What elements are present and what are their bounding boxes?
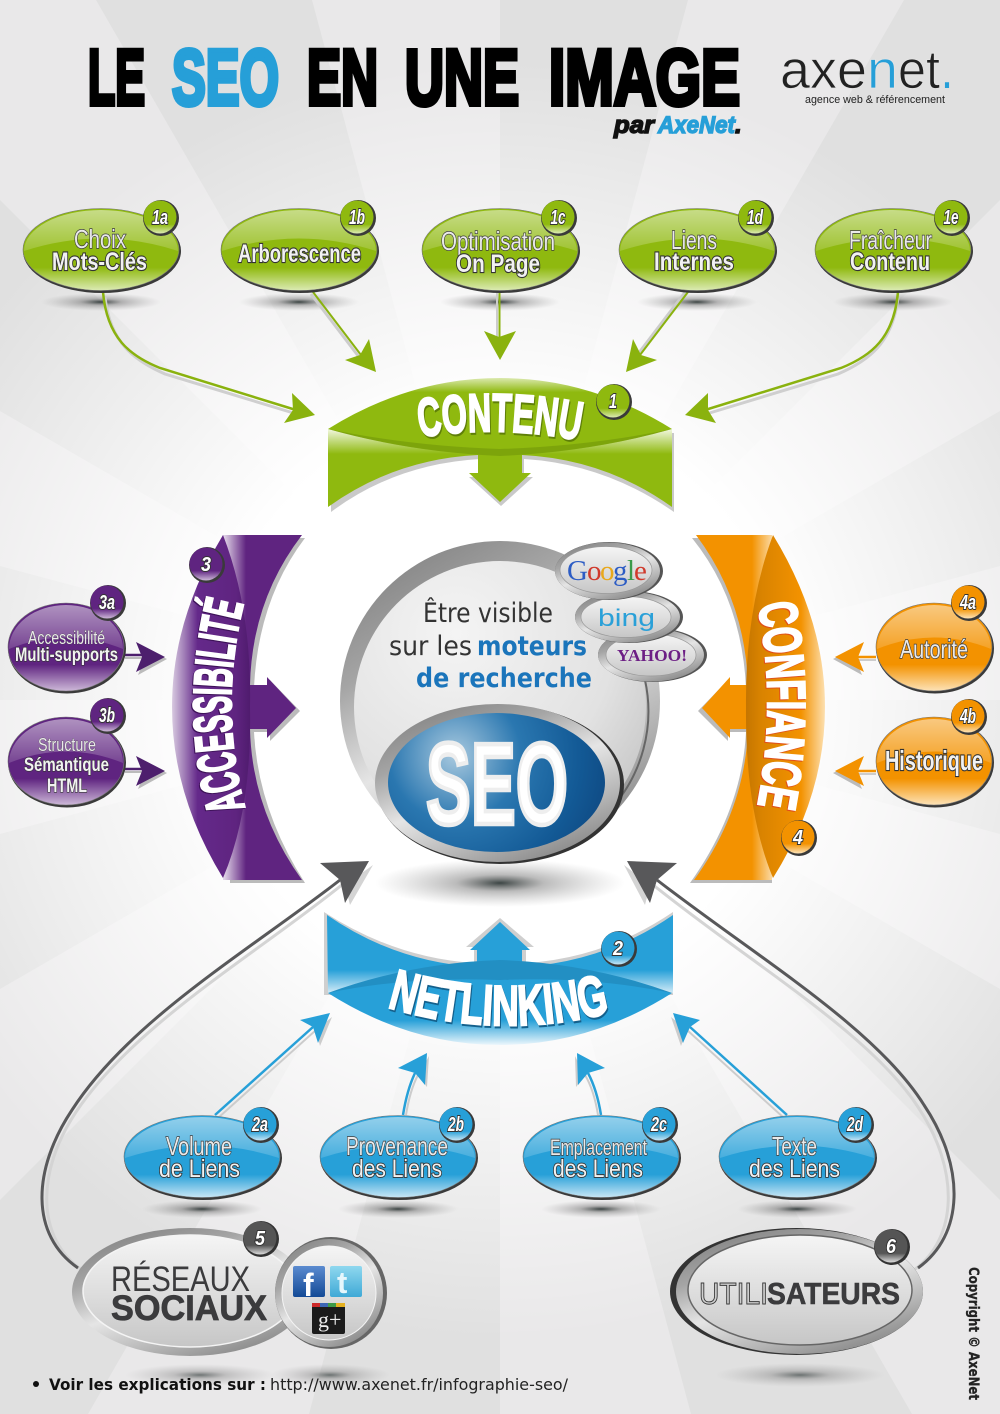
confiance label: CONFIANCE: [756, 602, 806, 812]
footer link: http://www.axenet.fr/infographie-seo/: [270, 1375, 569, 1394]
badge 2d: 2d: [846, 1114, 864, 1136]
pill: bing: [575, 591, 683, 643]
logo: axenet: [780, 40, 953, 106]
icon: google plus: g+: [318, 1307, 341, 1332]
badge 1: [596, 384, 632, 420]
bubble 1c: Optimisation On Page: On Page: [456, 250, 540, 278]
bubble 3a: Accessibilité Multi-supports: Accessibilité: [28, 628, 105, 648]
pill: yahoo: YAHOO!: [617, 646, 687, 665]
badge 3a: 3a: [99, 592, 115, 614]
accessibilité label: ACCESSIBILITÉ: [191, 596, 246, 812]
title: EN: [307, 32, 378, 122]
badge 1d: 1d: [747, 207, 764, 229]
bubble 2b: Provenance des Liens: [320, 1116, 478, 1200]
subtitle: par AxeNet: par: [613, 112, 656, 139]
contenu label: CONTENU: [418, 393, 586, 442]
bubble 1e: Fraîcheur Contenu: [815, 208, 973, 293]
badge 3a: [90, 585, 126, 621]
pill: google: l: [627, 555, 635, 587]
badge 1b: [340, 200, 376, 236]
badge 6: 6: [886, 1236, 897, 1258]
badge 5: 5: [255, 1228, 266, 1250]
bubble 2d: Texte des Liens: [719, 1116, 877, 1200]
badge 2a: [243, 1107, 279, 1143]
bubble 1e: Fraîcheur Contenu: Contenu: [850, 248, 930, 276]
arrow: 1a to contenu: [103, 292, 315, 423]
seo emblem: SEO: [426, 719, 568, 849]
arrow: 1b to contenu: [311, 292, 376, 372]
bubble 1b: Arborescence: [221, 208, 379, 293]
ribbon: netlinking: [324, 912, 673, 1045]
logo: axenet: axe: [780, 40, 867, 100]
badge 2: 2: [612, 938, 623, 960]
arrow: 1d to contenu: [626, 291, 688, 372]
arrow: 2d to netlinking: [671, 1013, 787, 1118]
bubble 1a: Choix Mots-Clés: Choix: [74, 224, 126, 254]
social icons disc: [275, 1237, 387, 1349]
pill: google: G: [567, 555, 588, 587]
ribbon: contenu: [328, 378, 674, 512]
réseaux sociaux panel: SOCIAUX: [111, 1289, 268, 1328]
bubble 3b: Structure Sémantique HTML: Sémantique: [24, 755, 109, 776]
badge 4: [781, 820, 817, 856]
badge 1a: [143, 200, 179, 236]
badge 2b: [439, 1107, 475, 1143]
bubble 2a: Volume de Liens: Volume: [166, 1131, 232, 1161]
badge 3: [189, 547, 225, 583]
title: IMAGE: [549, 32, 740, 122]
bubble 1d: Liens Internes: Liens: [671, 225, 717, 255]
bubble 1d: Liens Internes: [619, 208, 777, 293]
arrow: réseaux sociaux to seo: [42, 861, 373, 1270]
arrow: 2c to netlinking: [575, 1053, 605, 1115]
badge 4a: 4a: [959, 592, 976, 614]
arrow: 2a to netlinking: [215, 1013, 332, 1118]
central seo disc: [340, 541, 660, 864]
arrow: 3b to accessibilité: [125, 756, 167, 789]
badge 2a: 2a: [251, 1114, 268, 1136]
bubble 3b: Structure Sémantique HTML: HTML: [47, 776, 87, 797]
bubble 3b: Structure Sémantique HTML: [8, 717, 126, 808]
badge 1d: [738, 200, 774, 236]
pill: bing: bing: [598, 605, 655, 632]
badge 4a: [951, 585, 987, 621]
tagline: sur les: [389, 631, 472, 662]
logo: axenet: et: [898, 40, 940, 100]
réseaux sociaux panel: [72, 1228, 308, 1356]
badge 5: [243, 1221, 279, 1257]
bubble 2c: Emplacement des Liens: [523, 1116, 681, 1200]
bubble 4b: Historique: [876, 717, 994, 808]
pill: google: o: [600, 555, 614, 587]
bubble 2a: Volume de Liens: [124, 1116, 282, 1200]
arrow: 4b to confiance: [833, 756, 876, 789]
tagline: de recherche: [416, 663, 592, 694]
subtitle: par AxeNet: AxeNet: [657, 112, 736, 139]
bubble 3a: Accessibilité Multi-supports: Multi-supports: [15, 645, 118, 666]
badge 1a: 1a: [152, 207, 168, 229]
ribbon: confiance: [690, 535, 825, 883]
bubble 2d: Texte des Liens: Texte: [772, 1131, 817, 1161]
netlinking label: NETLINKING: [388, 968, 608, 1028]
bubble 2a: Volume de Liens: de Liens: [159, 1155, 240, 1183]
tagline: Être visible: [423, 597, 553, 629]
title: UNE: [405, 32, 519, 122]
badge 2b: 2b: [447, 1114, 464, 1136]
arrow: 1e to contenu: [685, 292, 898, 423]
logo: axenet: .: [941, 40, 953, 100]
footer link: Voir les explications sur :: [49, 1375, 266, 1394]
réseaux sociaux panel: RÉSEAUX: [111, 1260, 250, 1299]
contact shadows: [41, 293, 953, 1387]
bubble 2d: Texte des Liens: des Liens: [749, 1155, 840, 1183]
title: SEO: [172, 32, 279, 122]
badge 3: 3: [201, 554, 211, 576]
icon: twitter: t: [337, 1265, 347, 1300]
title: [88, 32, 740, 122]
badge 2c: [642, 1107, 678, 1143]
pill: yahoo: [598, 628, 707, 682]
badge 1c: 1c: [550, 207, 566, 229]
bubble 2c: Emplacement des Liens: Emplacement: [550, 1135, 647, 1160]
bubble 2b: Provenance des Liens: Provenance: [346, 1131, 448, 1161]
bubble 4a: Autorité: [876, 603, 994, 694]
badge 2c: 2c: [650, 1114, 667, 1136]
arrow: 4a to confiance: [833, 642, 876, 675]
bubble 2b: Provenance des Liens: des Liens: [352, 1155, 442, 1183]
bubble 1c: Optimisation On Page: [422, 208, 580, 293]
badge 1e: 1e: [944, 207, 958, 229]
pill: google: e: [634, 555, 647, 587]
arrow: 2b to netlinking: [398, 1053, 429, 1115]
pill: google: o: [587, 555, 602, 587]
utilisateurs panel: UTILI: [699, 1276, 768, 1311]
pill: google: g: [613, 555, 628, 587]
bubble 1e: Fraîcheur Contenu: Fraîcheur: [849, 225, 932, 255]
tagline: moteurs: [477, 631, 587, 662]
footer link: [33, 1375, 569, 1394]
badge 3b: [90, 698, 126, 734]
badge 4: 4: [792, 827, 803, 849]
title: LE: [88, 32, 145, 122]
badge 3b: 3b: [99, 705, 115, 727]
subtitle: par AxeNet: .: [735, 112, 742, 139]
bubble 1a: Choix Mots-Clés: Mots-Clés: [52, 248, 147, 276]
seo emblem: [375, 704, 624, 864]
bubble 3a: Accessibilité Multi-supports: [8, 603, 126, 694]
icon: facebook: f: [303, 1267, 314, 1303]
badge 1b: 1b: [349, 207, 365, 229]
logo: axenet: n: [867, 40, 898, 100]
badge 6: [874, 1229, 910, 1265]
utilisateurs panel: SATEURS: [767, 1276, 900, 1311]
pill: google: [555, 542, 663, 600]
bubble 1b: Arborescence: Arborescence: [238, 240, 361, 268]
arrow: 1c to contenu: [484, 292, 516, 360]
badge 1: 1: [609, 391, 617, 413]
bubble 2c: Emplacement des Liens: des Liens: [553, 1155, 643, 1183]
ribbon: accessibilité: [172, 535, 305, 883]
utilisateurs panel: [670, 1228, 923, 1355]
bubble 1a: Choix Mots-Clés: [23, 208, 181, 293]
badge 2d: [838, 1107, 874, 1143]
bubble 3b: Structure Sémantique HTML: Structure: [38, 735, 96, 755]
arrow: 3a to accessibilité: [125, 642, 167, 675]
bubble 1d: Liens Internes: Internes: [654, 248, 734, 276]
badge 4b: 4b: [959, 706, 976, 728]
logo: axenet: agence web & référencement: [805, 94, 945, 106]
badge 4b: [951, 699, 987, 735]
tagline: [389, 597, 592, 694]
subtitle: par AxeNet: [613, 112, 742, 139]
arrow: utilisateurs to seo: [624, 861, 954, 1270]
badge 1e: [934, 200, 970, 236]
badge 1c: [541, 200, 577, 236]
bubble 1c: Optimisation On Page: Optimisation: [441, 226, 555, 256]
badge 2: [601, 931, 637, 967]
bubble 4a: Autorité: Autorité: [900, 634, 968, 664]
